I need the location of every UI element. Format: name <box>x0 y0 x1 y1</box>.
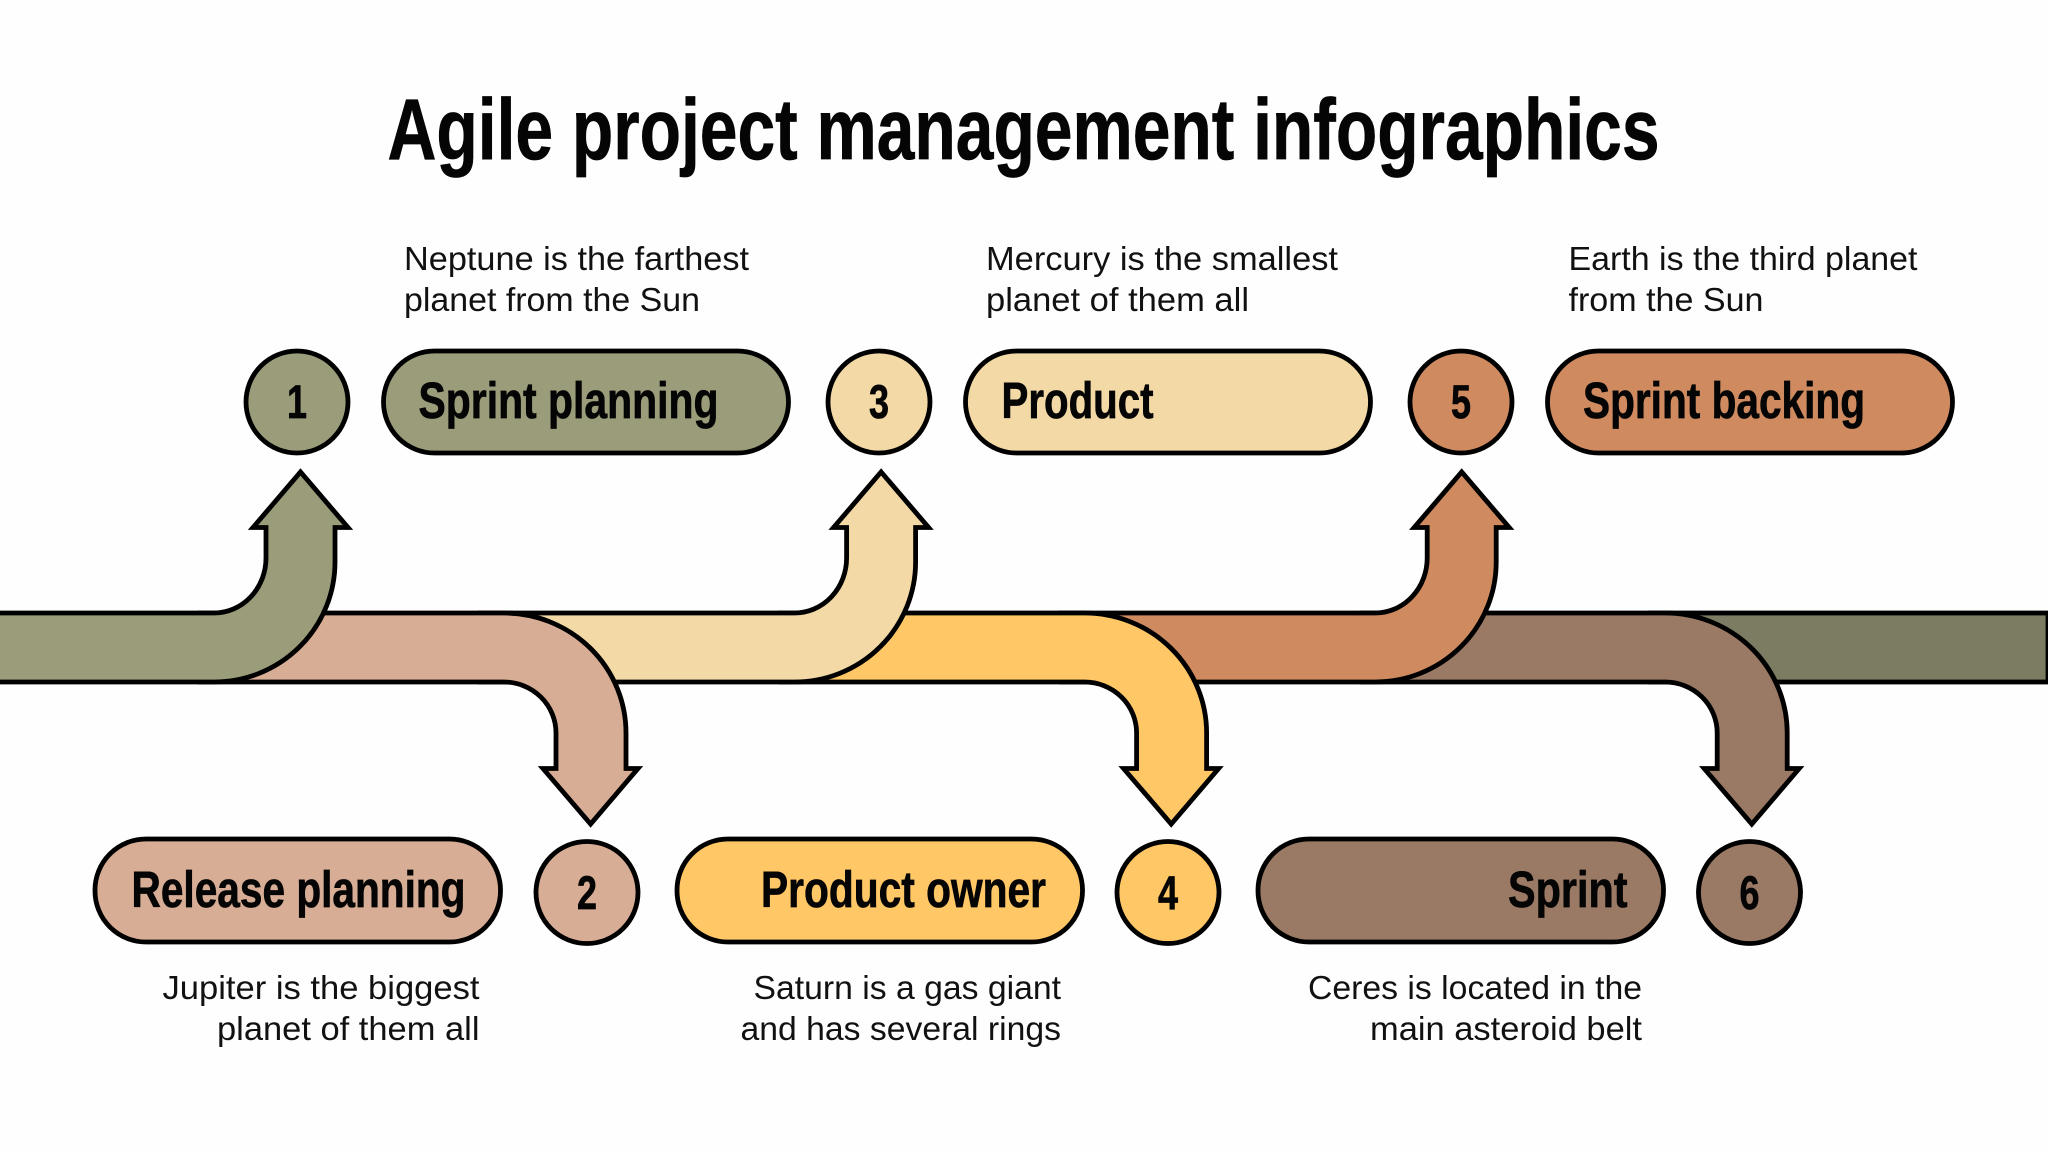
number circle 1 <box>246 351 348 453</box>
step 6: sprint <box>1258 839 1800 1048</box>
pill 6 <box>1258 839 1664 942</box>
arrow 4: yellow, pointing down <box>781 613 1219 824</box>
pill 4: Product owner <box>761 861 1046 918</box>
description 6: Ceres is located in the <box>1308 970 1642 1007</box>
pill 6: Sprint <box>1508 861 1628 918</box>
step 2: release planning <box>95 839 638 1048</box>
arrow 5: orange, pointing up <box>1061 472 1509 682</box>
description 2: Jupiter is the biggest <box>162 970 480 1007</box>
pill 5 <box>1548 351 1952 453</box>
description 3: Mercury is the smallest <box>986 241 1339 278</box>
description 5: from the Sun <box>1568 282 1764 319</box>
pill 1: Sprint planning <box>418 372 718 429</box>
number circle 5: 5 <box>1451 375 1471 428</box>
flow of arrows <box>0 472 2048 824</box>
number circle 2 <box>536 842 638 944</box>
arrow 6: brown, pointing down <box>1362 613 1799 824</box>
arrow 2: pink, pointing down <box>200 613 638 824</box>
number circle 1: 1 <box>287 375 307 428</box>
number circle 4 <box>1117 842 1219 944</box>
description 4: Saturn is a gas giant <box>754 970 1062 1007</box>
arrow 1: green, pointing up <box>0 472 348 682</box>
step 3: product <box>828 241 1370 453</box>
number circle 3 <box>828 351 930 453</box>
pill 1 <box>384 351 788 453</box>
description 2: planet of them all <box>217 1011 480 1048</box>
band end: dark green <box>1650 613 2048 682</box>
arrow 3: cream, pointing up <box>480 472 929 682</box>
description 6: main asteroid belt <box>1370 1011 1643 1048</box>
pill 2: Release planning <box>132 861 466 918</box>
pill 4 <box>677 839 1082 942</box>
step 1: sprint planning <box>246 241 788 453</box>
pill 3: Product <box>1002 372 1154 429</box>
number circle 6: 6 <box>1740 866 1760 919</box>
step 4: product owner <box>677 839 1219 1048</box>
number circle 2: 2 <box>577 866 597 919</box>
description 1: planet from the Sun <box>404 282 700 319</box>
number circle 6 <box>1698 842 1800 944</box>
pill 2 <box>95 839 500 942</box>
number circle 5 <box>1410 351 1512 453</box>
pill 3 <box>966 351 1370 453</box>
title: Agile project management infographics <box>388 82 1660 178</box>
pill 5: Sprint backing <box>1583 372 1865 429</box>
description 5: Earth is the third planet <box>1568 241 1918 278</box>
number circle 3: 3 <box>869 375 889 428</box>
number circle 4: 4 <box>1158 866 1178 919</box>
description 4: and has several rings <box>740 1011 1061 1048</box>
description 1: Neptune is the farthest <box>404 241 750 278</box>
description 3: planet of them all <box>986 282 1249 319</box>
step 5: sprint backing <box>1410 241 1952 453</box>
